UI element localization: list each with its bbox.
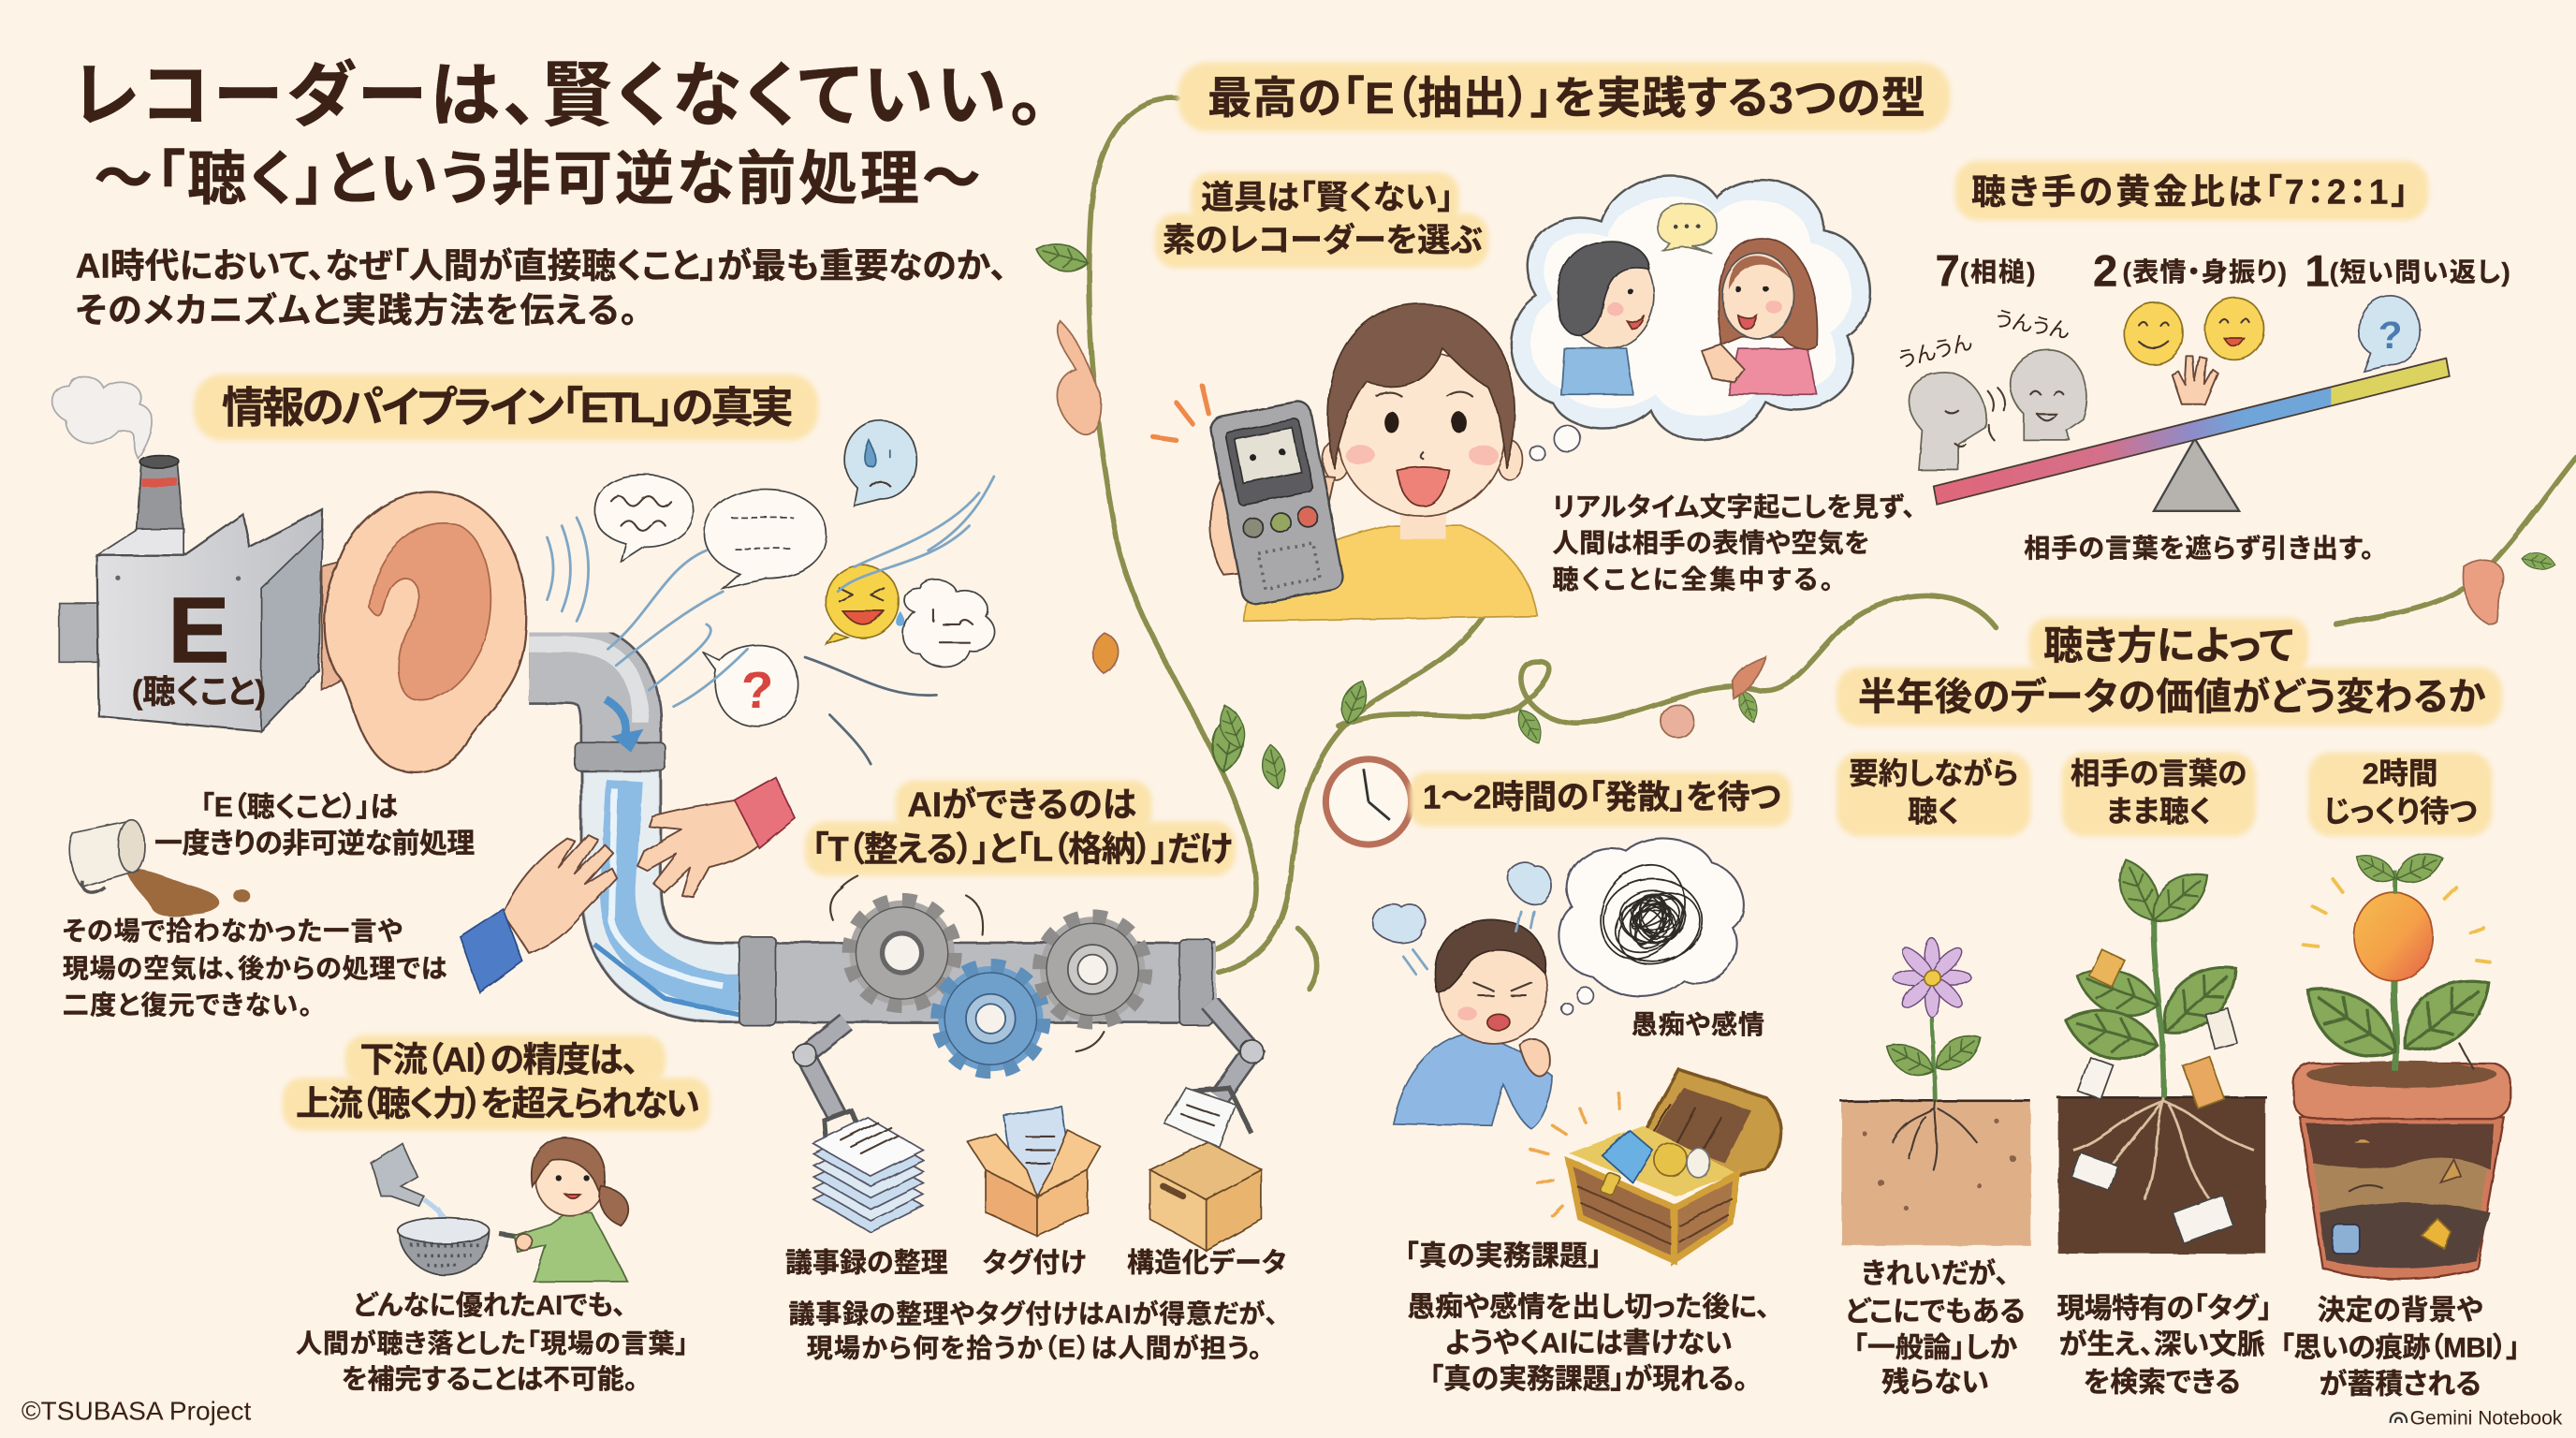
heading: recorder: 道具は「賢くない」 xyxy=(1201,180,1454,216)
text: cannot restore: 現場の空気は、後からの処理では xyxy=(63,954,447,983)
label: E xyxy=(132,578,266,711)
text: AI strengths xyxy=(788,1299,1278,1363)
wind strokes xyxy=(607,477,994,764)
ratio labels xyxy=(1935,246,2510,296)
illustration: rooted plant with tags xyxy=(2056,853,2267,1254)
heading: listening methods: 聴き方によって xyxy=(2043,624,2293,668)
icon: treasure chest xyxy=(1531,1070,1781,1260)
hands on pipe xyxy=(460,777,795,992)
speech bubbles xyxy=(594,420,995,726)
icon: smile faces and hand xyxy=(2124,296,2420,404)
text: column 3: が蓄積される xyxy=(2320,1368,2481,1400)
intro text: AI時代において、なぜ「人間が直接聴くこと」が最も重要なのか、 xyxy=(76,247,1007,286)
ratio labels: (表情・身振り) xyxy=(2123,257,2287,286)
column headings: 2時間 xyxy=(2363,756,2438,790)
heading: wait for divergence xyxy=(1410,772,1791,827)
column headings: 相手の言葉の xyxy=(2071,756,2247,790)
text: recorder description: 聴くことに全集中する。 xyxy=(1553,565,1834,594)
ratio labels: (相槌) xyxy=(1960,257,2036,286)
heading: AI scope: 「T（整える）」と「L（格納）」だけ xyxy=(812,830,1232,869)
heading: ETL: 情報のパイプライン「ETL」の真実 xyxy=(222,384,794,432)
illustration: flower xyxy=(1840,938,2030,1245)
text: draw out: 相手の言葉を遮らず引き出す。 xyxy=(2024,534,2374,563)
text: true issues description: 愚痴や感情を出し切った後に、 xyxy=(1407,1292,1770,1323)
icon: factory with smoke xyxy=(52,376,322,731)
text: column 2 xyxy=(2056,1294,2272,1399)
column headings: 要約しながら xyxy=(1849,756,2018,790)
ratio labels: 1 xyxy=(2305,246,2330,296)
icon: smile faces and hand: ? xyxy=(2378,313,2402,357)
character: boy with recorder xyxy=(1153,304,1538,621)
clock xyxy=(1325,759,1412,844)
column headings xyxy=(1837,753,2492,836)
icon: open box xyxy=(968,1107,1101,1236)
icon: nodding heads xyxy=(1909,350,2086,470)
text: column 2: を検索できる xyxy=(2084,1368,2241,1399)
heading: three patterns xyxy=(1178,63,1950,131)
text: irreversible: 「E（聴くこと）」は xyxy=(200,792,398,823)
text: cannot complement: を補完することは不可能。 xyxy=(342,1365,637,1395)
heading: downstream: 下流（AI）の精度は、 xyxy=(359,1040,639,1078)
panel: three practices xyxy=(1153,63,2510,1395)
text: un-un: うんうん xyxy=(1895,330,1974,373)
heading: ETL xyxy=(194,374,818,440)
label: E: (聴くこと) xyxy=(132,674,266,711)
text: AI strengths: 議事録の整理やタグ付けはAIが得意だが、 xyxy=(788,1299,1278,1328)
title: レコーダーは、賢くなくていい。 xyxy=(72,56,1045,135)
ratio labels: (短い問い返し) xyxy=(2330,257,2510,286)
pipe xyxy=(529,644,1216,1025)
sound waves xyxy=(547,518,589,621)
text: column 1 xyxy=(1845,1258,2026,1399)
heading: wait for divergence: 1〜2時間の「発散」を待つ xyxy=(1423,779,1781,815)
heading: AI scope: AIができるのは xyxy=(907,785,1136,824)
text: column 1: 「一般論」しか xyxy=(1853,1333,2017,1364)
vines xyxy=(1032,98,2576,990)
labels: AI outputs xyxy=(785,1247,1286,1278)
heading: downstream: 上流（聴く力）を超えられない xyxy=(296,1085,700,1123)
thought cloud: conversation xyxy=(1511,176,1870,461)
heading: golden ratio xyxy=(1955,161,2428,220)
column headings: 聴く xyxy=(1908,795,1959,829)
text: true issues description: ようやくAIには書けない xyxy=(1445,1328,1733,1358)
text: true issues description: 「真の実務課題」が現れる。 xyxy=(1429,1363,1748,1395)
icon: closed box with paper xyxy=(1150,1088,1262,1251)
text: recorder description: リアルタイム文字起こしを見ず、 xyxy=(1553,492,1915,521)
intro text xyxy=(76,247,1007,330)
heading: three patterns: 最高の「E（抽出）」を実践する3つの型 xyxy=(1208,74,1925,124)
text: column 2: が生え、深い文脈 xyxy=(2059,1328,2265,1360)
heading: listening methods xyxy=(1837,618,2502,726)
text: irreversible: 一度きりの非可逆な前処理 xyxy=(154,829,475,859)
text: column 3 xyxy=(2280,1295,2520,1400)
labels: AI outputs: 議事録の整理 xyxy=(785,1248,948,1278)
robot arms xyxy=(794,1003,1264,1142)
text: recorder description xyxy=(1553,492,1915,594)
text: cannot restore: 二度と復元できない。 xyxy=(63,990,313,1020)
icon: spilled cup xyxy=(69,820,250,917)
text: true issues description xyxy=(1407,1292,1770,1395)
column headings: じっくり待つ xyxy=(2323,795,2477,829)
label: E: E xyxy=(168,578,230,682)
gears xyxy=(830,875,1145,1071)
text: column 2: 現場特有の「タグ」 xyxy=(2056,1294,2272,1325)
ratio labels: 7 xyxy=(1935,246,1960,296)
text: column 1: どこにでもある xyxy=(1845,1297,2026,1328)
copyright: ©TSUBASA Project xyxy=(22,1396,251,1425)
text: column 3: 「思いの痕跡（MBI）」 xyxy=(2280,1333,2520,1364)
heading: recorder xyxy=(1155,172,1488,268)
icon: ear xyxy=(322,492,526,772)
seesaw xyxy=(1934,359,2450,511)
text: column 1: きれいだが、 xyxy=(1862,1258,2009,1290)
text: cannot restore xyxy=(63,917,447,1020)
panel: ETL pipeline xyxy=(52,374,1286,1395)
heading: recorder: 素のレコーダーを選ぶ xyxy=(1163,222,1483,259)
text: cannot restore: その場で拾わなかった一言や xyxy=(63,917,402,946)
character: complaining boy xyxy=(1372,862,1553,1129)
text: un-un: うんうん xyxy=(1993,306,2071,343)
text: AI strengths: 現場から何を拾うか（E）は人間が担う。 xyxy=(807,1333,1262,1363)
speech bubbles: ? xyxy=(741,660,773,719)
subtitle: ～「聴く」という非可逆な前処理～ xyxy=(94,146,981,212)
heading: AI scope xyxy=(805,781,1236,875)
labels: AI outputs: 構造化データ xyxy=(1127,1247,1286,1278)
icon: document stack xyxy=(813,1117,923,1232)
text: cannot complement: 人間が聴き落とした「現場の言葉」 xyxy=(296,1328,688,1357)
text: irreversible xyxy=(154,792,475,859)
text: cannot complement xyxy=(296,1291,688,1395)
text: un-un xyxy=(1895,306,2071,373)
text: column 3: 決定の背景や xyxy=(2318,1295,2483,1326)
panel: value after six months xyxy=(1837,618,2520,1400)
text: cannot complement: どんなに優れたAIでも、 xyxy=(353,1291,626,1321)
intro text: そのメカニズムと実践方法を伝える。 xyxy=(76,291,637,330)
label: complaints: 愚痴や感情 xyxy=(1632,1010,1764,1039)
labels: AI outputs: タグ付け xyxy=(983,1247,1086,1278)
ratio labels: 2 xyxy=(2093,246,2117,296)
watermark: Gemini Notebook xyxy=(2410,1408,2563,1430)
icon: girl pouring water into colander xyxy=(372,1137,628,1282)
heading: golden ratio: 聴き手の黄金比は「7：2：1」 xyxy=(1971,173,2408,212)
text: column 1: 残らない xyxy=(1881,1368,1989,1399)
illustration: pot with fruit xyxy=(2292,845,2510,1279)
text: true issues: 「真の実務課題」 xyxy=(1405,1240,1602,1271)
text: recorder description: 人間は相手の表情や空気を xyxy=(1553,529,1869,558)
column headings: まま聴く xyxy=(2106,795,2211,829)
heading: listening methods: 半年後のデータの価値がどう変わるか xyxy=(1858,675,2485,718)
heading: downstream xyxy=(283,1035,710,1130)
thought cloud: tangled scribble xyxy=(1559,839,1744,1015)
